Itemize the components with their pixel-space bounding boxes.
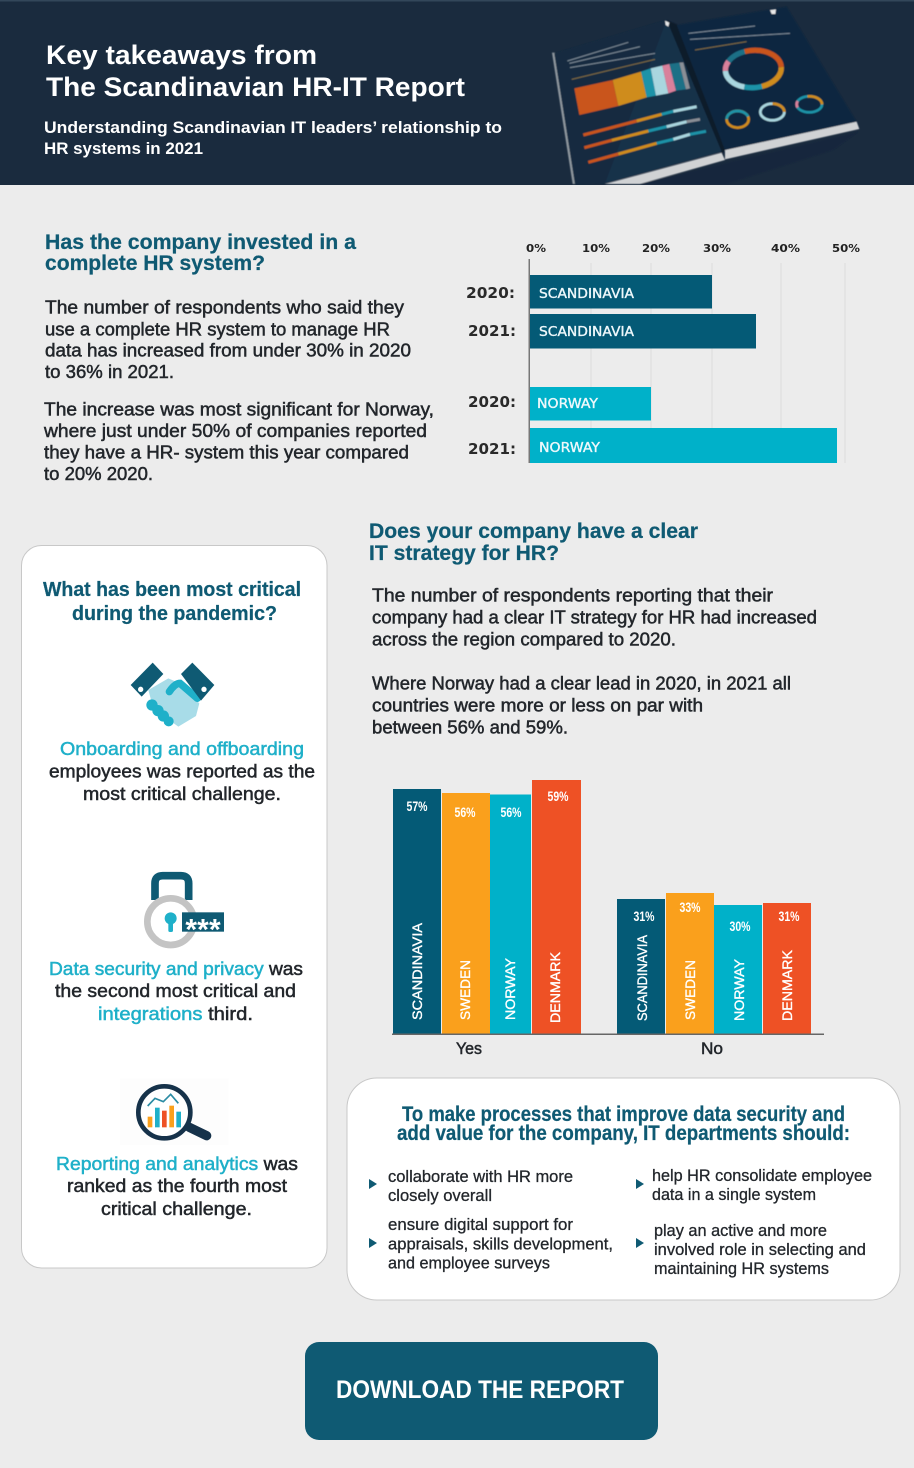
bullet: collaborate — [369, 1167, 573, 1205]
column chart: SWEDEN — [682, 960, 698, 1020]
column chart: 31% — [634, 908, 655, 924]
body text: to 20% 2020. — [44, 463, 153, 484]
horizontal bar chart — [466, 242, 860, 463]
body text: use a complete HR system to manage HR — [45, 318, 390, 340]
title: The Scandinavian HR-IT Report — [46, 72, 465, 102]
subtitle: Understanding Scandinavian IT leaders’ relationship to — [44, 118, 502, 137]
column chart: SWEDEN — [457, 960, 473, 1020]
horizontal bar chart: NORWAY — [539, 441, 600, 456]
column chart: 31% — [778, 908, 800, 924]
heading: complete HR system? — [45, 252, 265, 275]
panel: IT department recommendations — [347, 1078, 900, 1300]
text: reporting — [56, 1153, 298, 1219]
text: data security: integrations third. — [98, 1003, 253, 1024]
heading — [369, 520, 698, 565]
body text: where just under 50% of companies reported — [43, 420, 427, 441]
bullet: active role: maintaining HR systems — [654, 1259, 829, 1278]
column chart: 56% — [454, 804, 476, 820]
horizontal bar chart: SCANDINAVIA — [539, 325, 634, 340]
body text: countries were more or less on par with — [372, 694, 703, 716]
heading: Does your company have a clear — [369, 520, 698, 543]
bullet: active role: involved role in selecting and — [654, 1240, 866, 1259]
subtitle — [44, 118, 502, 158]
horizontal bar chart: 20% — [642, 242, 670, 255]
panel heading: To make processes that improve data security and — [402, 1103, 845, 1126]
column chart: SCANDINAVIA — [634, 934, 650, 1021]
body text: The number of respondents who said they — [45, 296, 405, 318]
icon: padlock: *** — [185, 913, 221, 946]
column chart: NORWAY — [502, 957, 518, 1020]
text: reporting: ranked as the fourth most — [67, 1175, 287, 1196]
bullet: consolidate: help HR consolidate employee — [652, 1166, 872, 1185]
section: IT strategy for HR — [369, 520, 824, 1058]
text: data security: the second most critical and — [55, 980, 296, 1001]
report book image — [552, 7, 859, 184]
horizontal bar chart: 2020: — [466, 284, 515, 302]
bullet: digital support: appraisals, skills development, — [388, 1234, 613, 1254]
icon: handshake — [131, 663, 214, 727]
body text: data has increased from under 30% in 2020 — [45, 340, 411, 360]
body text: between 56% and 59%. — [372, 716, 568, 738]
body text — [372, 584, 817, 738]
column chart: 33% — [680, 899, 701, 915]
horizontal bar chart: 40% — [771, 242, 800, 255]
icon: padlock — [147, 876, 224, 946]
column chart: 57% — [406, 798, 428, 814]
bullet: active role: play an active and more — [654, 1221, 827, 1240]
bullet: consolidate: data in a single system — [652, 1185, 816, 1204]
bullet: digital support: and employee surveys — [388, 1254, 550, 1272]
horizontal bar chart: 2021: — [468, 322, 516, 340]
horizontal bar chart: 2021: — [468, 440, 516, 458]
horizontal bar chart: 30% — [703, 242, 731, 255]
bullet: collaborate: collaborate with HR more — [388, 1167, 573, 1186]
panel: critical during the pandemic — [22, 546, 327, 1268]
text: reporting: Reporting and analytics was — [56, 1153, 298, 1174]
body text: to 36% in 2021. — [45, 361, 174, 382]
text: onboarding: Onboarding and offboarding — [60, 738, 304, 759]
icon: magnifier with chart — [120, 1078, 228, 1145]
body text — [43, 296, 434, 484]
heading — [45, 231, 356, 275]
column chart: 59% — [548, 788, 569, 804]
horizontal bar chart: 10% — [582, 242, 610, 255]
text: reporting: critical challenge. — [101, 1198, 252, 1219]
bullet: collaborate: closely overall — [388, 1186, 492, 1205]
body text: Where Norway had a clear lead in 2020, in 2021 all — [372, 672, 791, 694]
body text: The increase was most significant for Norway, — [44, 398, 434, 420]
body text: they have a HR- system this year compared — [44, 442, 409, 462]
text: data security: Data security and privacy was — [49, 958, 303, 979]
download button: DOWNLOAD THE REPORT — [336, 1376, 624, 1404]
body text: company had a clear IT strategy for HR had increased — [372, 606, 817, 628]
subtitle: HR systems in 2021 — [44, 139, 203, 158]
text: onboarding: employees was reported as the — [49, 760, 315, 782]
panel heading: during the pandemic? — [72, 603, 277, 625]
title: Key takeaways from — [46, 40, 317, 70]
header banner — [0, 0, 914, 185]
bullet: digital support: ensure digital support for — [388, 1215, 573, 1234]
column chart: Yes — [456, 1039, 482, 1058]
column chart: DENMARK — [779, 949, 795, 1021]
horizontal bar chart: 2020: — [468, 393, 516, 411]
bullet: digital support — [369, 1215, 613, 1272]
column chart — [392, 780, 824, 1058]
column chart: 56% — [500, 804, 522, 820]
horizontal bar chart: 50% — [832, 242, 860, 255]
column chart: SCANDINAVIA — [409, 922, 425, 1020]
bullet: active role — [636, 1221, 866, 1278]
heading: Has the company invested in a — [45, 231, 356, 254]
panel heading: What has been most critical — [43, 579, 301, 601]
text: onboarding — [49, 738, 315, 804]
panel heading — [397, 1103, 850, 1145]
section: complete HR system — [43, 231, 860, 484]
column chart: 30% — [730, 918, 751, 934]
column chart: DENMARK — [547, 951, 563, 1023]
download button — [305, 1342, 658, 1440]
body text: The number of respondents reporting that their — [372, 584, 773, 606]
text: data security — [49, 958, 303, 1024]
horizontal bar chart: SCANDINAVIA — [539, 287, 634, 302]
panel heading — [43, 579, 301, 625]
title — [46, 40, 465, 102]
horizontal bar chart: NORWAY — [537, 397, 598, 412]
heading: IT strategy for HR? — [369, 542, 559, 565]
horizontal bar chart: 0% — [526, 242, 546, 255]
bullet: consolidate — [636, 1166, 872, 1204]
text: onboarding: most critical challenge. — [83, 783, 281, 804]
panel heading: add value for the company, IT departments should: — [397, 1122, 850, 1145]
column chart: No — [701, 1039, 723, 1058]
column chart: NORWAY — [731, 958, 747, 1021]
body text: across the region compared to 2020. — [372, 628, 676, 650]
